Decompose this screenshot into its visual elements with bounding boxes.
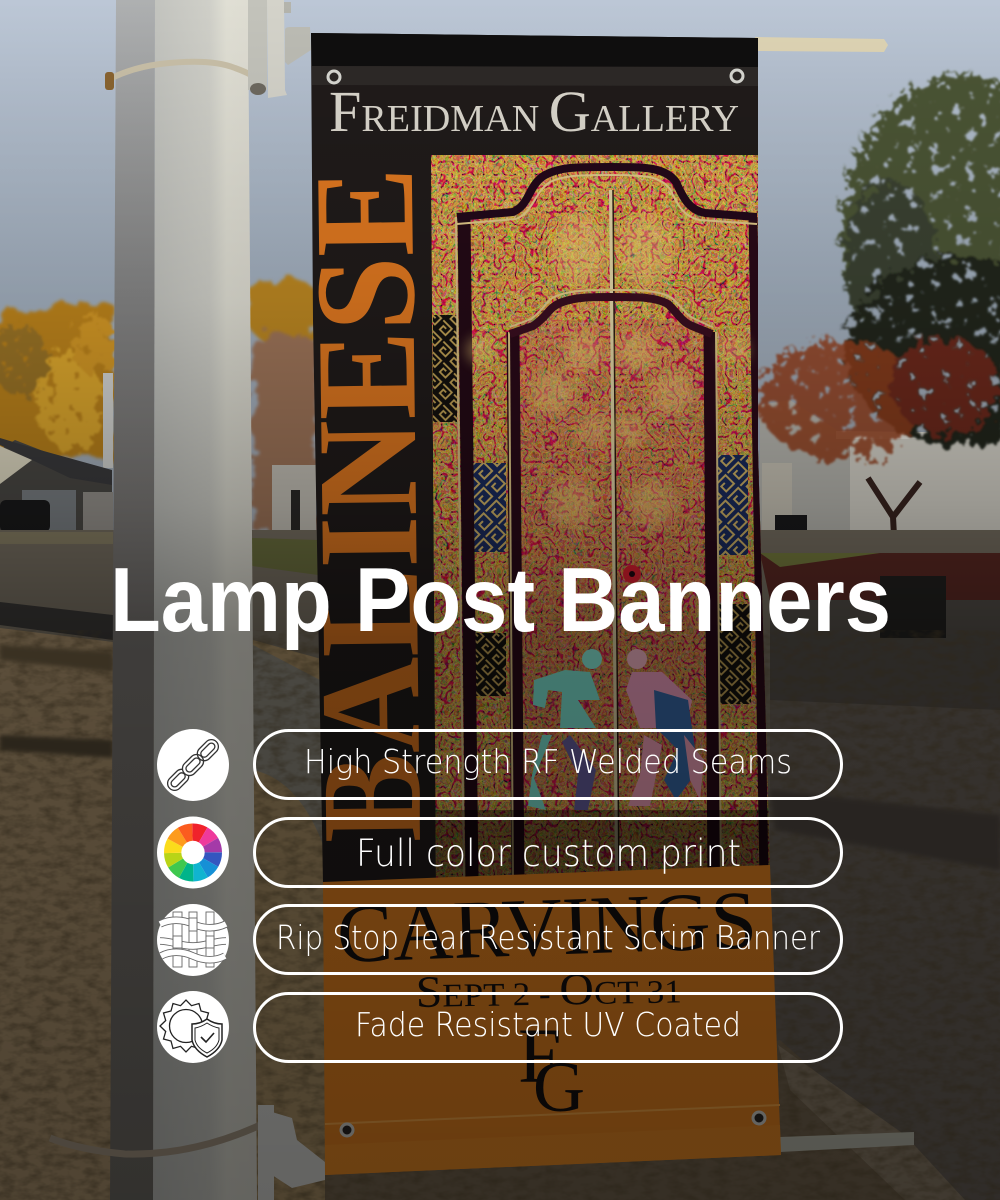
left strip lattices xyxy=(473,463,506,696)
pill label xyxy=(254,730,842,798)
carved pink dancer xyxy=(626,649,704,806)
road and ground xyxy=(0,530,1000,1200)
pill label xyxy=(254,818,842,886)
feature row: UV coated xyxy=(157,991,842,1063)
pill label xyxy=(254,994,842,1062)
left autumn trees xyxy=(0,278,325,531)
red tree trunk xyxy=(868,478,920,555)
feature row: welded seams xyxy=(157,729,842,801)
pill label: Rip Stop Tear Resistant Scrim Banner xyxy=(276,918,820,957)
post strap bottom xyxy=(50,1118,275,1154)
door lower shading xyxy=(436,810,770,878)
gallery monogram: G xyxy=(533,1047,585,1127)
banner body xyxy=(311,33,770,884)
pill label: Full color custom print xyxy=(356,832,741,875)
gallery monogram: F xyxy=(518,1012,561,1099)
grommets xyxy=(328,70,765,1136)
title: Lamp Post Banners xyxy=(110,550,891,651)
gallery name: FREIDMAN GALLERY xyxy=(329,79,739,144)
icon: chain xyxy=(157,729,229,801)
bottom banner rod xyxy=(780,1132,914,1152)
icon: sun and shield xyxy=(157,991,229,1063)
magenta panel tint xyxy=(520,320,708,800)
orange panel xyxy=(323,865,781,1175)
door frame verticals xyxy=(456,190,764,880)
icon: color wheel xyxy=(157,816,229,888)
lower hem xyxy=(325,1125,781,1175)
hem seam xyxy=(325,1104,780,1125)
feature row: rip stop xyxy=(157,904,842,976)
white street sign xyxy=(103,373,113,468)
gallery monogram xyxy=(518,1012,585,1127)
right strip lattices xyxy=(717,455,751,704)
feature row: full color xyxy=(157,816,842,888)
lamp post xyxy=(50,0,325,1200)
door artwork xyxy=(431,155,771,885)
lower bracket xyxy=(258,1105,325,1200)
hem band xyxy=(311,33,758,67)
grommet strip xyxy=(312,66,758,86)
inner arch xyxy=(510,290,712,334)
pill label: Fade Resistant UV Coated xyxy=(355,1005,741,1044)
red tree xyxy=(758,337,1000,460)
street banner xyxy=(285,33,781,1175)
post strap top xyxy=(105,62,262,90)
right house xyxy=(760,400,1000,555)
outer arch xyxy=(457,167,757,224)
pill label: High Strength RF Welded Seams xyxy=(304,742,792,781)
icon: woven scrim xyxy=(157,904,229,976)
green tree xyxy=(840,75,1000,445)
left house xyxy=(0,438,113,532)
carved rosettes xyxy=(466,214,749,528)
top banner rod xyxy=(755,37,888,52)
carved blue dancer xyxy=(528,649,602,810)
pill label xyxy=(254,906,842,974)
upper bracket xyxy=(248,0,311,98)
red ornament xyxy=(623,565,641,583)
outer left lattice xyxy=(433,315,457,422)
vertical word Balinese: BALINESE xyxy=(285,167,451,844)
carvings heading: CARVINGS xyxy=(335,873,758,980)
dates: SEPT 2 - OCT 31 xyxy=(415,962,682,1017)
